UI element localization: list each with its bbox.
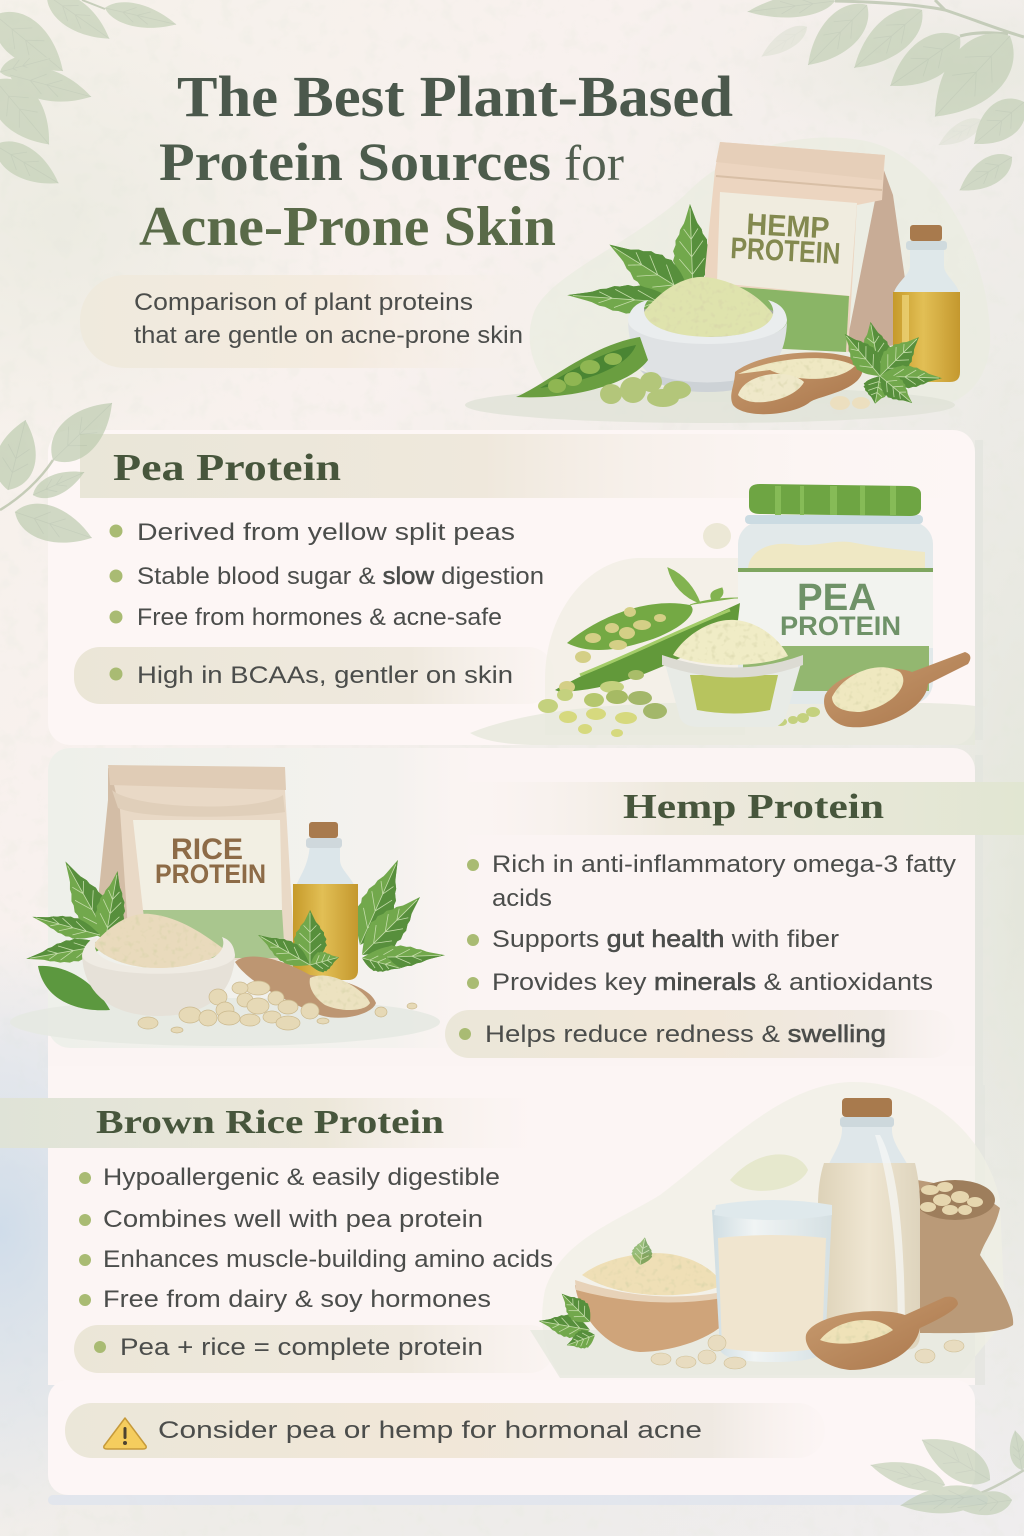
pea bullet list: Stable blood sugar & slow digestion (137, 563, 544, 590)
leaves in front of bottle (252, 910, 342, 975)
paper bag (705, 142, 908, 352)
rice highlight pill (74, 1325, 554, 1373)
subtitle pill: that are gentle on acne-prone skin (134, 322, 523, 349)
open pea pod (516, 337, 648, 397)
subtitle pill: Comparison of plant proteins (134, 289, 473, 316)
illustration: hemp protein products (465, 137, 990, 423)
decorative leaves: top left (0, 0, 179, 196)
scattered split peas (538, 670, 820, 737)
illustration: pea protein products (470, 484, 975, 745)
hemp bullet list: Rich in anti-inflammatory omega-3 fatty (492, 851, 956, 878)
blob backdrop (530, 137, 990, 405)
pea highlight pill (74, 647, 554, 704)
illustration: rice milk products (530, 1082, 1013, 1378)
hemp heading band (430, 782, 1024, 835)
pea highlight pill: High in BCAAs, gentler on skin (137, 662, 513, 689)
hemp bullet list: acids (492, 885, 552, 912)
paper bag: PROTEIN (155, 859, 266, 889)
hemp bullet list (467, 851, 956, 996)
oil bottle (893, 225, 960, 382)
wooden scoop (235, 956, 376, 1018)
pea bullet list: Free from hormones & acne-safe (137, 604, 502, 631)
oil bottle (293, 822, 358, 980)
paper bag: RICE (171, 833, 243, 866)
herb sprig (537, 1236, 655, 1354)
pea jar: PROTEIN (780, 611, 901, 641)
decorative leaves: top right (746, 0, 1024, 202)
front herb leaves (834, 319, 942, 412)
hemp bullet list: Supports gut health with fiber (492, 926, 839, 953)
left herb leaves (24, 853, 132, 1010)
ground shadow (10, 998, 440, 1046)
decorative leaves: bottom right (867, 1425, 1024, 1519)
paper bag: HEMP (746, 208, 830, 245)
paper bag (98, 765, 295, 960)
panel: brown rice protein (0, 1066, 985, 1385)
title: The Best Plant-Based (177, 64, 733, 129)
rice bullet list: Hypoallergenic & easily digestible (103, 1164, 500, 1191)
rice bullet list: Free from dairy & soy hormones (103, 1286, 491, 1313)
rice bullet list: Enhances muscle-building amino acids (103, 1246, 553, 1273)
rice heading band: Brown Rice Protein (96, 1104, 444, 1141)
pea heading band (80, 434, 975, 498)
pea jar (738, 484, 933, 704)
rice bullet list: Combines well with pea protein (103, 1206, 483, 1233)
warning pill: Consider pea or hemp for hormonal acne (158, 1417, 702, 1444)
hemp highlight pill (445, 1010, 955, 1058)
panel: warning note (48, 1380, 988, 1505)
sack of beans (915, 1180, 1013, 1333)
title: Acne-Prone Skin (139, 196, 556, 258)
hemp heading band: Hemp Protein (623, 787, 884, 826)
pea jar: PEA (797, 577, 876, 619)
wooden bowl of rice (575, 1253, 723, 1352)
milk bottle (818, 1098, 920, 1350)
pea bullet list: Derived from yellow split peas (137, 519, 515, 546)
hemp highlight pill: Helps reduce redness & swelling (485, 1021, 886, 1048)
decorative leaves: left branch (0, 389, 126, 554)
paper bag: PROTEIN (730, 232, 841, 271)
green leaves behind bowl (566, 203, 712, 318)
warning pill (65, 1403, 825, 1458)
bowl of rice powder (82, 914, 235, 1016)
glass of milk (712, 1200, 832, 1362)
glass bowl with peas (662, 620, 803, 727)
pea heading band: Pea Protein (113, 447, 341, 489)
title: Protein Sources (159, 132, 551, 192)
pea pods (555, 568, 740, 693)
green beans (600, 372, 691, 407)
scattered beans (138, 981, 417, 1033)
wooden scoop (806, 1297, 958, 1370)
wooden scoop (824, 652, 970, 727)
pea bullet list (110, 519, 544, 631)
panel: pea protein (48, 430, 983, 745)
icon: warning triangle (104, 1418, 146, 1449)
panel: hemp protein (48, 748, 1024, 1088)
title (139, 64, 733, 258)
rice heading band (0, 1098, 540, 1148)
illustration: rice protein products (10, 765, 445, 1046)
subtitle pill (80, 275, 560, 368)
bowl of hemp powder (628, 277, 787, 392)
ground shadow (465, 387, 955, 423)
right herb leaves (344, 853, 445, 977)
hemp bullet list: Provides key minerals & antioxidants (492, 969, 933, 996)
title: for (564, 135, 624, 191)
blob backdrop (542, 1082, 1005, 1375)
wooden scoop (731, 352, 870, 414)
rice highlight pill: Pea + rice = complete protein (120, 1334, 483, 1361)
small beans (651, 1335, 964, 1369)
rice bullet list (79, 1164, 553, 1313)
blob backdrop (545, 558, 745, 735)
